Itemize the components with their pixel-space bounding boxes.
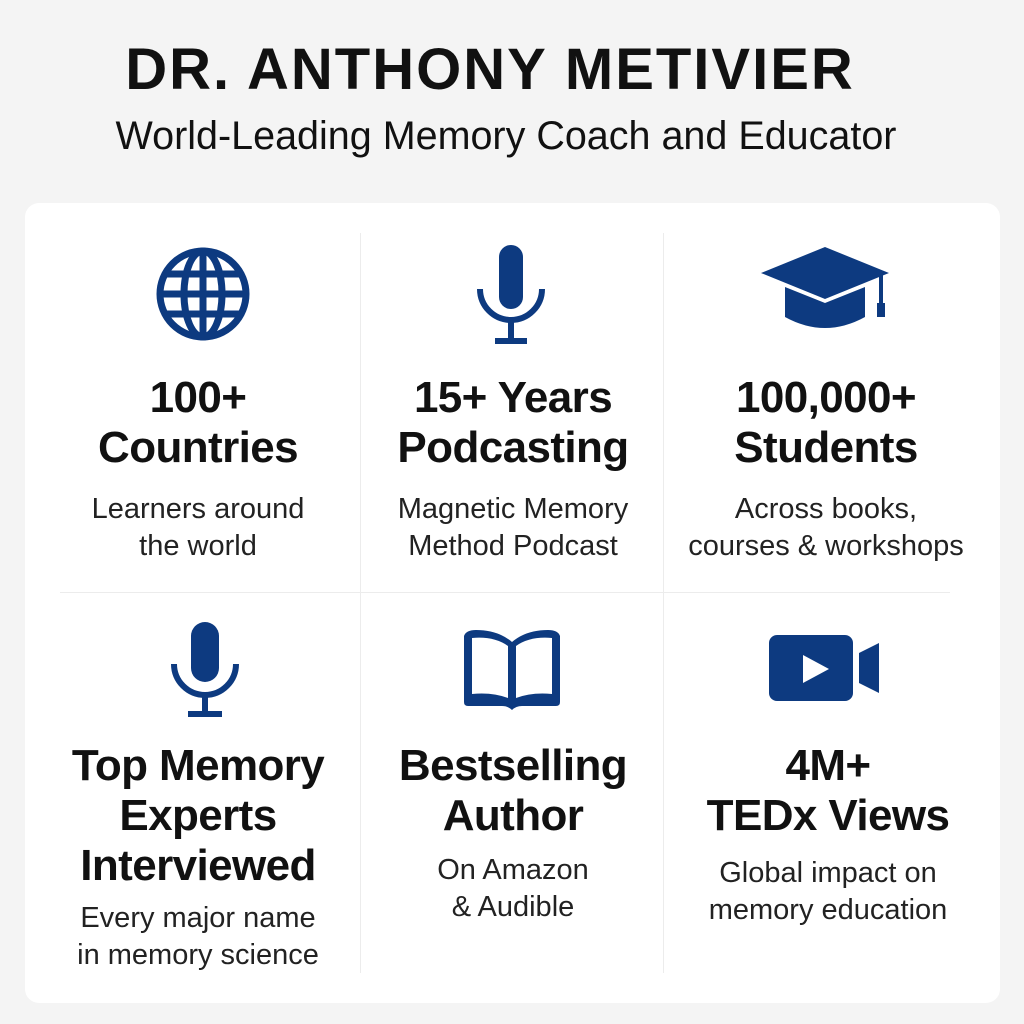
icon: microphone [477, 245, 545, 344]
stat 2 [397, 373, 629, 562]
stat 4: Experts [119, 791, 277, 840]
stat 3: Students [734, 423, 918, 472]
subtitle: World-Leading Memory Coach and Educator [116, 114, 896, 158]
stat 2: Magnetic Memory [398, 493, 628, 525]
stat 5: On Amazon [437, 854, 589, 886]
stat 5: Author [443, 791, 583, 840]
stat 1: the world [139, 530, 257, 562]
stat 6: 4M+ [785, 741, 871, 790]
icon: microphone 2 [171, 622, 239, 717]
stat 4: Top Memory [72, 741, 324, 790]
stat 3: Across books, [735, 493, 917, 525]
stat 1: Countries [98, 423, 298, 472]
stat 2: Method Podcast [408, 530, 618, 562]
panel: stats grid [25, 203, 1000, 1003]
stat 6: memory education [709, 894, 947, 926]
stat 2: Podcasting [397, 423, 629, 472]
stat 6 [707, 741, 949, 926]
stat 6: TEDx Views [707, 791, 949, 840]
icon: globe [156, 248, 250, 340]
stat 5: & Audible [452, 891, 574, 923]
stat 2: 15+ Years [414, 373, 612, 422]
stat 4: Interviewed [80, 841, 316, 890]
stat 3 [688, 373, 964, 562]
stat 4: Every major name [80, 902, 316, 934]
stat 1: Learners around [92, 493, 304, 525]
stat 6: Global impact on [719, 857, 937, 889]
stat 1: 100+ [150, 373, 246, 422]
icon: graduation cap [761, 247, 889, 328]
stat 1 [92, 373, 304, 562]
stat 5 [399, 741, 627, 923]
stat 3: 100,000+ [736, 373, 916, 422]
icon: video camera [769, 635, 879, 701]
stat 5: Bestselling [399, 741, 627, 790]
title: DR. ANTHONY METIVIER [125, 37, 855, 102]
stat 3: courses & workshops [688, 530, 964, 562]
stat 4: in memory science [77, 939, 319, 971]
stat 4 [72, 741, 324, 971]
icon: book [464, 630, 560, 710]
